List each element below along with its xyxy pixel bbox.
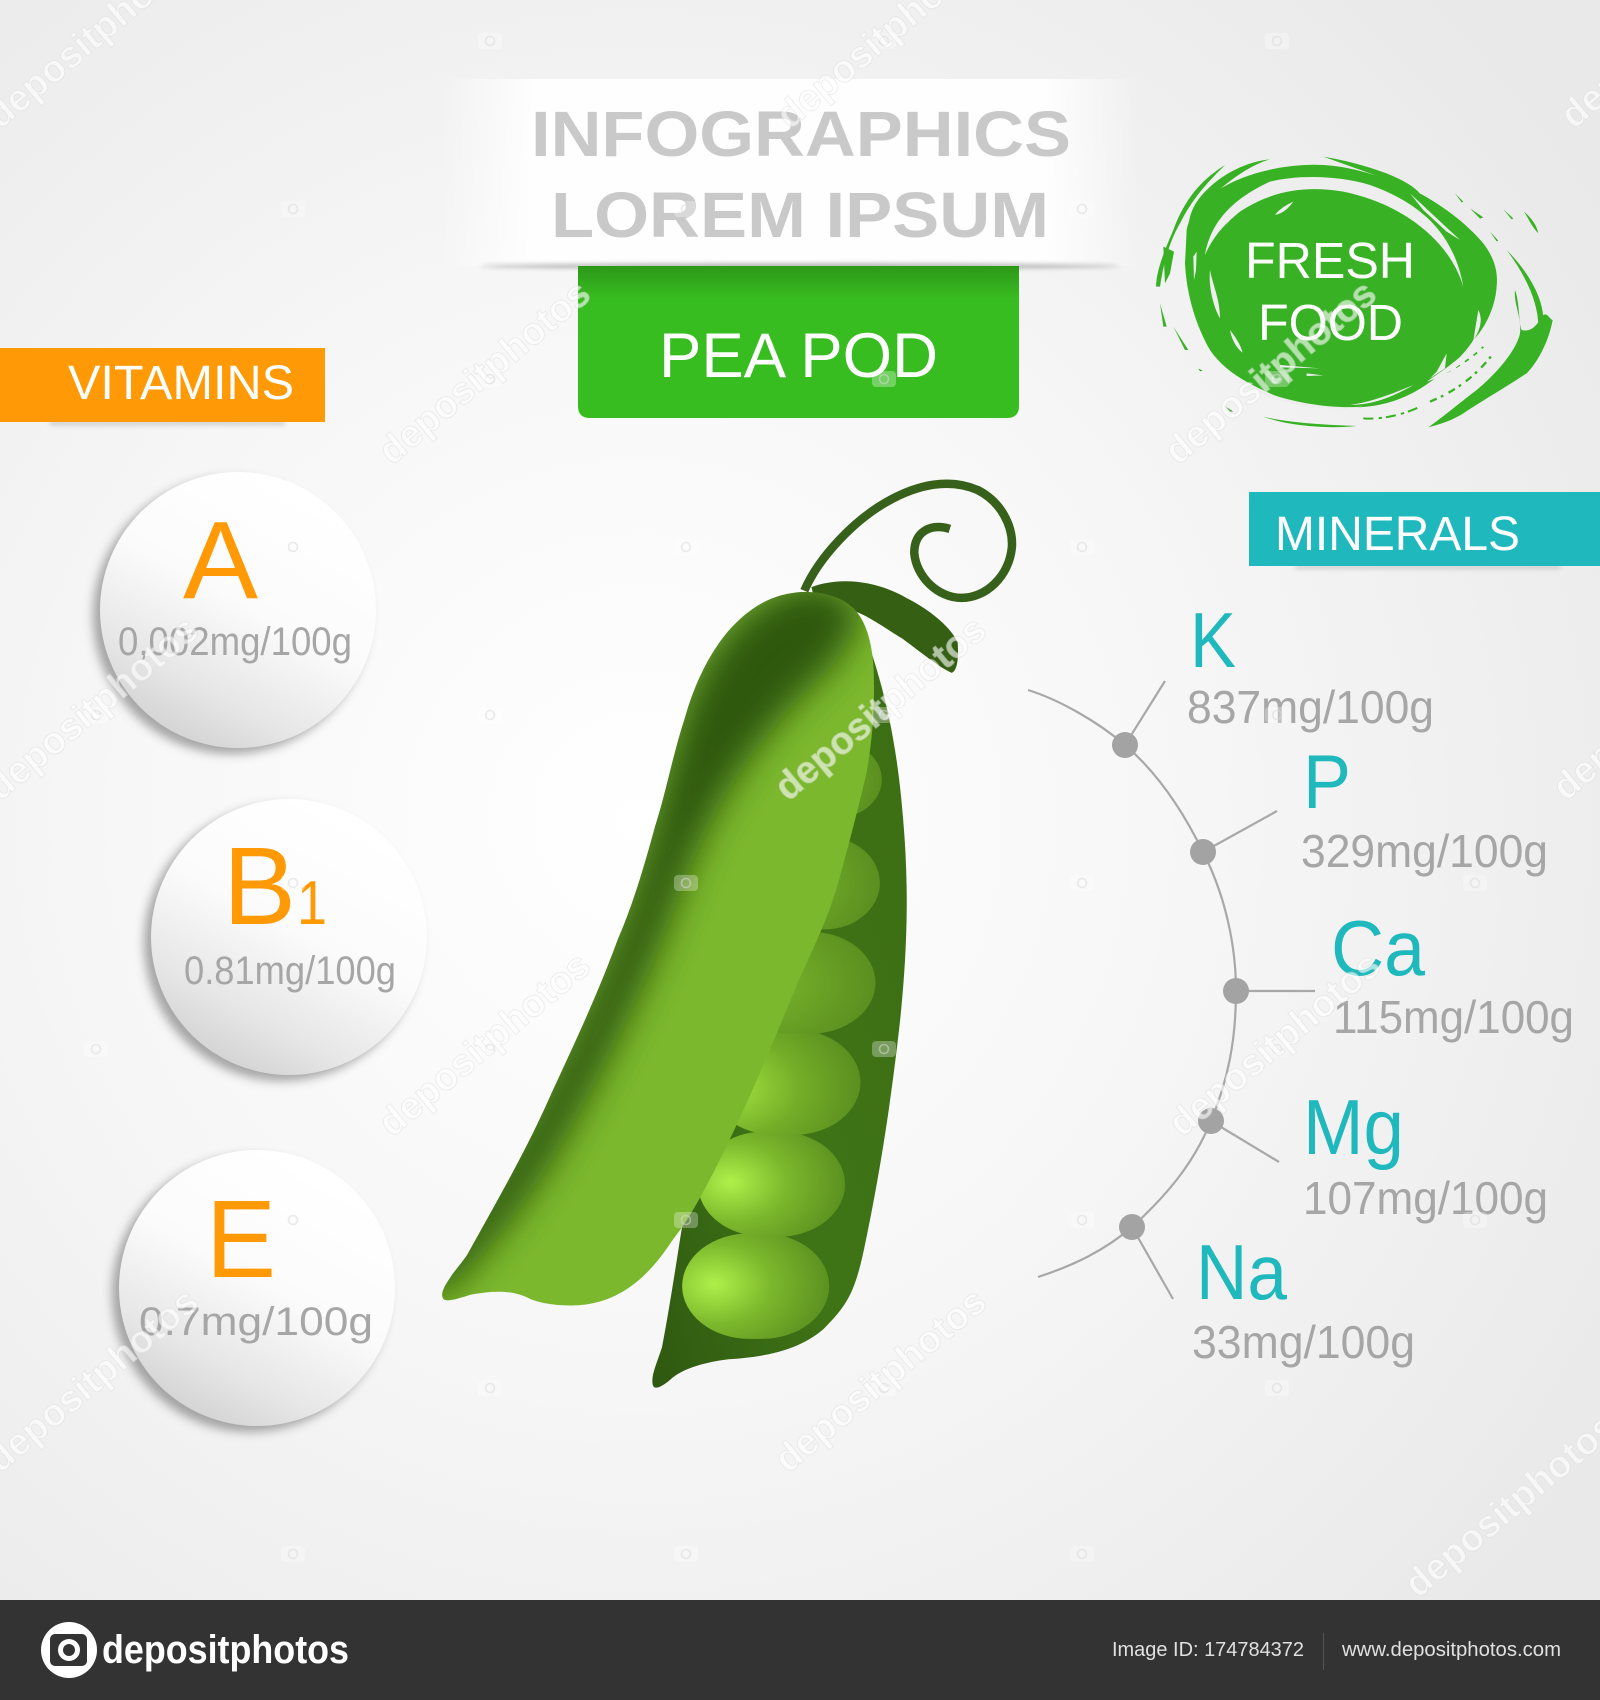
mineral K: 837mg/100g: [1187, 681, 1434, 733]
mineral Mg: Mg: [1303, 1083, 1404, 1171]
title text: INFOGRAPHICS: [531, 98, 1071, 170]
image id: Image ID: 174784372: [1112, 1639, 1304, 1661]
vitamin A disc: [93, 472, 376, 754]
vitamin E disc: 0.7mg/100g: [139, 1300, 373, 1344]
title text: [531, 98, 1071, 251]
mineral Na: 33mg/100g: [1192, 1316, 1415, 1368]
minerals heading: MINERALS: [1275, 508, 1520, 561]
title panel: [440, 79, 1140, 268]
watermark pattern: depositphotos: [767, 608, 994, 809]
stem: [811, 581, 958, 673]
mineral Ca: [1331, 904, 1574, 1043]
icon: camera logo: [41, 1622, 97, 1678]
vitamin A disc: A: [183, 499, 259, 622]
vitamin B1 disc: 0.81mg/100g: [184, 949, 396, 993]
vitamin A disc: 0,002mg/100g: [118, 620, 352, 664]
vitamin B1 disc: 1: [297, 869, 327, 938]
stamp brush shape: [1156, 157, 1553, 427]
tendril: [804, 484, 1012, 598]
mineral Na: Na: [1196, 1228, 1288, 1316]
minerals arc connector: [1028, 681, 1315, 1299]
peas: [682, 741, 882, 1339]
watermark pattern: depositphotos: [1157, 272, 1384, 473]
logo wordmark: depositphotos: [102, 1628, 349, 1672]
minerals heading: [1249, 492, 1600, 569]
mineral P: P: [1303, 740, 1351, 825]
mineral P: 329mg/100g: [1301, 825, 1548, 877]
mineral Mg: 107mg/100g: [1303, 1172, 1548, 1224]
stamp text: FOOD: [1258, 294, 1403, 351]
footer bar: [0, 1600, 1600, 1700]
vitamin B1 disc: [144, 799, 427, 1081]
back pod shell: [652, 628, 907, 1388]
title text: LOREM IPSUM: [551, 179, 1049, 251]
vitamins heading: VITAMINS: [68, 357, 294, 410]
watermark pattern: depositphotos: [1161, 944, 1388, 1145]
mineral K: K: [1190, 596, 1236, 684]
mineral Na: [1192, 1228, 1415, 1368]
banner: pea pod: [578, 266, 1019, 418]
vitamins heading: [0, 348, 325, 425]
mineral K: [1187, 596, 1434, 733]
stamp text: FRESH: [1245, 232, 1415, 289]
vitamin E disc: E: [206, 1178, 276, 1301]
vitamin E disc: [112, 1150, 395, 1432]
mineral P: [1301, 740, 1548, 877]
stamp text: [1245, 232, 1415, 351]
stamp: fresh food: [1156, 157, 1553, 427]
mineral Mg: [1303, 1083, 1548, 1224]
stamp brush gaps: [1193, 177, 1481, 409]
front pod shell: [442, 592, 874, 1306]
mineral Ca: 115mg/100g: [1333, 991, 1574, 1043]
mineral Ca: Ca: [1331, 904, 1426, 992]
vitamin B1 disc: B: [223, 825, 296, 948]
banner: pea pod: PEA POD: [659, 321, 938, 391]
pea pod illustration: [420, 484, 1012, 1388]
watermark pattern: depositphotos: [371, 944, 598, 1145]
website: www.depositphotos.com: [1341, 1639, 1561, 1661]
watermark pattern: depositphotos: [767, 1280, 994, 1481]
watermark pattern: depositphotos: [371, 272, 598, 473]
